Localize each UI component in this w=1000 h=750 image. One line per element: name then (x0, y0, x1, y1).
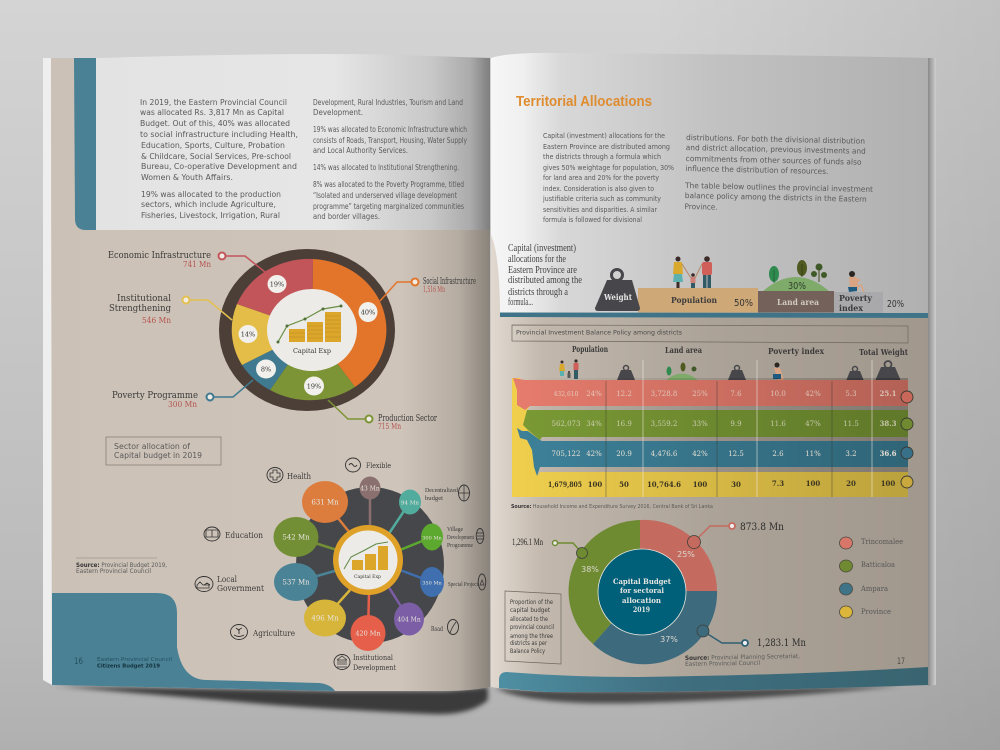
chart: sector bubble wheel (274, 476, 444, 651)
callout: table title: Provincial Investment Balance Policy among districts (516, 328, 683, 336)
icon: seated person (848, 271, 864, 292)
label: social infrastructure: 1,516 Mn (423, 285, 445, 294)
label: poverty programme: Poverty Programme (112, 391, 198, 401)
text block: territorial left column: index. Consideration is also given to (543, 184, 654, 193)
table row: Province: 50 (619, 480, 629, 489)
text block: left column intro: to social infrastructure including Health, (140, 130, 298, 139)
source note: left page: Source: Provincial Budget 2019, (76, 562, 167, 569)
text block: right column intro: Development. (313, 108, 363, 117)
icon: family (673, 256, 712, 288)
donut percentages (581, 550, 695, 644)
percent badges: 14% (241, 330, 255, 338)
table row: Province: 100 (806, 479, 820, 488)
text block: formula summary: districts through a (508, 286, 568, 298)
page shadow (55, 686, 900, 714)
table row: Ampara: 20.9 (616, 450, 632, 458)
table row: Province: 10,764.6 (647, 480, 681, 489)
label: production sector: 715 Mn (378, 422, 401, 431)
label: poverty programme: 300 Mn (168, 400, 197, 409)
source note: left page (76, 558, 167, 575)
table row: Trincomalee: 12.2 (616, 390, 632, 398)
callout: balance policy note: capital budget (510, 607, 551, 614)
bubble values: 94 Mn (401, 500, 419, 506)
bubble values: 496 Mn (311, 614, 339, 622)
land area segment: 30% (788, 281, 806, 292)
callout: balance policy note: districts as per (510, 640, 547, 647)
panel: right page (491, 53, 936, 692)
poverty segment: index (839, 303, 863, 313)
population segment (638, 288, 758, 312)
text block: formula summary: formula... (508, 296, 533, 308)
source note: right page: Source: Provincial Planning Secretariat, (685, 653, 800, 662)
heading: territorial allocations: Territorial Allocations (516, 94, 652, 110)
table row: Ampara: 42% (692, 450, 708, 458)
label: special project (448, 574, 486, 590)
legend: districts: Batticaloa (861, 561, 895, 569)
label: village development programme (447, 526, 484, 549)
center hub (333, 525, 403, 595)
table row: Batticaloa (552, 419, 897, 428)
table row: Trincomalee: 24% (586, 390, 602, 398)
chart: capital budget donut (219, 249, 395, 411)
label: economic infrastructure: 741 Mn (183, 260, 211, 269)
poverty segment (834, 292, 904, 313)
text block: formula summary: Capital (investment) (508, 242, 576, 254)
text block: territorial left column: sensitivities and disparities. A similar (543, 205, 657, 214)
table: column headers: Poverty index (768, 346, 824, 356)
label: economic infrastructure (108, 251, 265, 272)
table row: Ampara: 42% (586, 450, 602, 458)
table row: Batticaloa: 38.3 (879, 419, 897, 428)
table row: Ampara: 11% (805, 450, 821, 458)
table row: Trincomalee: 10.0 (770, 390, 786, 398)
callout: table title (512, 325, 908, 343)
text block: territorial left column: Capital (investment) allocations for the (543, 131, 665, 140)
label: flexible (346, 458, 391, 472)
bubble values: 537 Mn (282, 578, 310, 586)
table row: Ampara: 12.5 (728, 450, 744, 458)
label: agriculture: Agriculture (252, 629, 295, 638)
text block: left column intro: Fisheries, Livestock, Irrigation, Rural (141, 211, 280, 220)
table row: Province: 20 (846, 479, 856, 488)
label: village development programme: Programme (447, 542, 473, 549)
text block: right column intro: and Local Authority Services. (313, 146, 408, 155)
text block: left column intro: sectors, which include Agriculture, (141, 200, 276, 209)
table row: Province (548, 479, 895, 489)
poverty segment: Poverty (839, 293, 872, 303)
table row: Batticaloa: 34% (586, 420, 602, 428)
footer: left page (74, 657, 172, 670)
table: header icons (559, 359, 901, 381)
table: column headers: Land area (665, 345, 702, 355)
text block: left column intro: Bureau, Co-operative Development and (141, 162, 297, 171)
percent badges (238, 275, 378, 396)
legend: districts (840, 537, 903, 618)
label: health: Health (287, 472, 311, 481)
callout: Batticaloa amount (512, 538, 588, 558)
connectors (296, 488, 432, 633)
callout: Ampara amount: 1,283.1 Mn (757, 638, 806, 649)
table row: Trincomalee: 432,610 (554, 391, 579, 398)
text block: formula summary: distributed among the (508, 274, 582, 286)
table row: Batticaloa: 562,073 (552, 420, 580, 428)
poverty segment: 20% (887, 299, 904, 310)
callout: balance policy note: allocated to the (510, 616, 548, 623)
callout: sector allocation: Sector allocation of (114, 442, 190, 451)
table row: Trincomalee: 25% (692, 390, 708, 398)
land area segment (758, 277, 834, 312)
weight formula bar (595, 256, 904, 313)
text block: formula summary: allocations for the (508, 253, 566, 265)
population segment: Population (671, 296, 717, 306)
land area segment: Land area (777, 298, 819, 308)
label: local government: Local (217, 575, 237, 584)
donut centre text: Capital Budget (613, 577, 671, 586)
text block: left column intro: was allocated Rs. 3,817 Mn as Capital (140, 108, 284, 117)
table row: Ampara (552, 449, 897, 458)
bubble values: 404 Mn (397, 616, 421, 624)
callout: Ampara amount (697, 625, 806, 649)
table: coloured rows and map (512, 360, 908, 497)
bubble values: 631 Mn (311, 498, 339, 506)
page number: 17: 17 (897, 657, 905, 667)
donut centre text: 2019 (633, 605, 650, 614)
label: economic infrastructure: Economic Infrastructure (108, 251, 211, 261)
donut percentages: 38% (581, 565, 599, 574)
bubble values: 350 Mn (422, 580, 443, 586)
text block: territorial left column: Eastern Province are distributed among (543, 142, 670, 151)
label: social infrastructure (380, 277, 476, 301)
text block: right column intro: 19% was allocated to Economic Infrastructure which (313, 125, 467, 134)
label: institutional development: Institutional (353, 653, 394, 662)
text block: territorial left column (542, 131, 674, 224)
table row: Batticaloa: 16.9 (616, 420, 632, 428)
source note: right page: Eastern Provincial Council (685, 660, 760, 668)
text block: territorial right column: Province. (685, 202, 718, 212)
label: institutional strengthening: 546 Mn (142, 316, 171, 325)
label: education (204, 527, 263, 541)
label: institutional strengthening: Strengthening (109, 304, 171, 314)
table row: Ampara: 36.6 (879, 449, 897, 458)
label: decentralized budget: Decentralized (425, 487, 459, 494)
text block: left column intro: Budget. Out of this, 40% was allocated (140, 119, 290, 128)
table row: Batticaloa: 3,559.2 (651, 420, 677, 428)
source note: right page (685, 653, 800, 668)
callout: balance policy note: Proportion of the (510, 599, 553, 606)
label: production sector: Production Sector (378, 414, 437, 424)
label: special project: Special Project (448, 581, 478, 588)
callout: sector allocation: Capital budget in 2019 (114, 451, 202, 460)
text block: territorial left column: formula is followed for divisional (543, 215, 642, 224)
table row: Batticaloa: 11.6 (770, 420, 786, 428)
label: agriculture (230, 624, 295, 640)
text block: territorial right column: balance policy among the districts in the Eastern (685, 191, 867, 204)
table row: Ampara: 4,476.6 (651, 450, 678, 458)
text block: right column intro: consists of Roads, Transport, Housing, Water Supply (313, 136, 467, 145)
label: local government: Government (217, 584, 265, 593)
icon: weight (595, 270, 640, 311)
source note: table: Source: Household Income and Expenditure Survey 2016, Central Bank of Sri Lanka (511, 504, 713, 510)
table row: Trincomalee: 3,728.8 (651, 390, 677, 398)
icon: trees (769, 260, 827, 283)
text block: territorial right column: distributions. For both the divisional distribution (686, 133, 865, 146)
text block: territorial right column: influence the distribution of resources. (685, 164, 828, 176)
text block: left column intro (140, 98, 298, 220)
text block: territorial right column: The table below outlines the provincial investment (684, 181, 873, 194)
table row: Province: 7.3 (772, 479, 784, 488)
text block: left column intro: Women & Youth Affairs. (141, 173, 233, 182)
table row: Province: 100 (693, 480, 707, 489)
table row: Trincomalee: 5.3 (845, 390, 857, 398)
center hub: Capital Exp (354, 574, 381, 580)
label: social infrastructure: Social Infrastructure (423, 277, 476, 287)
table row: Province: 1,679,805 (548, 480, 582, 489)
chart icon: coins and trend line (276, 304, 342, 344)
percent badges: 40% (361, 308, 375, 316)
table row: Ampara: 3.2 (845, 450, 857, 458)
text block: formula summary (508, 242, 582, 308)
table row: Ampara: 705,122 (552, 450, 580, 458)
text block: left column intro: 19% was allocated to the production (141, 190, 281, 199)
table row: Province: 100 (881, 479, 895, 488)
table row: Trincomalee (554, 389, 897, 398)
bubble values (274, 476, 444, 651)
text block: territorial left column: the districts through a formula which (543, 152, 661, 161)
chart: capital budget by district donut (569, 520, 717, 664)
table row: Batticaloa: 9.9 (730, 420, 742, 428)
text block: formula summary: Eastern Province are (508, 264, 577, 276)
panel: left page (43, 54, 490, 691)
bubble values: 420 Mn (355, 630, 381, 638)
label: decentralized budget (425, 485, 470, 502)
table: row markers (901, 391, 913, 488)
legend: districts: Province (861, 608, 891, 616)
table row: Batticaloa: 33% (692, 420, 708, 428)
label: village development programme: Village (447, 526, 463, 533)
donut centre text: allocation (622, 596, 662, 605)
text block: right column intro: 14% was allocated to Institutional Strengthening. (313, 163, 459, 172)
population segment: 50% (734, 298, 753, 309)
callout: balance policy note (505, 591, 561, 664)
donut centre text (613, 577, 671, 614)
text block: left column intro: In 2019, the Eastern Provincial Council (140, 98, 287, 107)
icon: weight: Weight (603, 292, 632, 302)
percent badges: 19% (307, 382, 321, 390)
label: local government (195, 575, 265, 593)
label: institutional strengthening: Institutional (117, 294, 171, 304)
text block: territorial left column: for land area and 20% for the poverty (543, 173, 660, 182)
table row: Batticaloa: 47% (805, 420, 821, 428)
text block: territorial right column: and district allocation, previous investments and (686, 143, 866, 156)
table row: Trincomalee: 42% (805, 390, 821, 398)
text block: right column intro: “Isolated and underserved village development (313, 191, 457, 200)
label: road (431, 620, 458, 634)
label: decentralized budget: budget (425, 495, 443, 502)
footer: left page: Eastern Provincial Council (97, 657, 172, 663)
table: column headers (572, 344, 908, 357)
text block: right column intro: programme” targeting marginalized communities (313, 202, 464, 211)
table: column headers: Population (572, 344, 608, 354)
text block: territorial left column: justifiable criteria such as community (542, 194, 662, 203)
text block: left column intro: & Childcare, Social Services, Pre-school (141, 152, 291, 161)
chart: capital budget donut: Capital Exp (293, 348, 331, 355)
callout: Trincomalee amount (688, 522, 784, 548)
table row: Province: 30 (731, 480, 741, 489)
text block: territorial left column: gives 50% weightage for population, 30% (543, 163, 674, 172)
label: production sector (328, 400, 437, 431)
callout: balance policy note: provincial council (510, 624, 554, 631)
text block: territorial right column (684, 133, 874, 215)
bubble values: 542 Mn (282, 534, 310, 542)
label: flexible: Flexible (366, 461, 391, 470)
table row: Batticaloa: 11.5 (843, 420, 859, 428)
legend: districts: Ampara (860, 585, 888, 593)
donut percentages: 37% (660, 635, 678, 644)
text block: right column intro: 8% was allocated to the Poverty Programme, titled (313, 180, 464, 189)
table row: Ampara: 2.6 (772, 450, 784, 458)
label: village development programme: Development (447, 534, 474, 541)
legend: districts: Trincomalee (861, 538, 903, 546)
percent badges: 19% (270, 280, 284, 288)
text block: right column intro: and border villages. (313, 212, 380, 221)
donut centre text: for sectoral (620, 586, 664, 595)
bubble values: 43 Mn (360, 486, 380, 492)
table row: Province: 100 (588, 480, 602, 489)
table row: Trincomalee: 7.6 (730, 390, 742, 398)
callout: Batticaloa amount: 1,296.1 Mn (512, 538, 543, 548)
callout: sector allocation (106, 437, 221, 465)
donut percentages: 25% (677, 550, 695, 559)
source note: left page: Eastern Provincial Council (76, 568, 151, 575)
label: road: Road (431, 625, 443, 633)
label: health (267, 468, 311, 482)
text block: right column intro: Development, Rural Industries, Tourism and Land (313, 98, 463, 107)
label: institutional development (334, 653, 396, 672)
footer: left page: 16 (74, 657, 83, 667)
label: poverty programme (112, 380, 253, 409)
label: institutional development: Development (353, 663, 396, 672)
callout: Trincomalee amount: 873.8 Mn (740, 522, 784, 533)
callout: balance policy note: Balance Policy (510, 648, 545, 655)
label: education: Education (225, 531, 263, 540)
table row: Trincomalee: 25.1 (879, 389, 897, 398)
table: column headers: Total Weight (859, 347, 908, 357)
callout: balance policy note: among the three (510, 633, 553, 640)
text block: left column intro: Education, Sports, Culture, Probation (141, 141, 285, 150)
text block: right column intro (313, 98, 467, 221)
bubble values: 300 Mn (422, 536, 443, 542)
footer: left page: Citizens Budget 2019 (97, 664, 160, 670)
percent badges: 8% (261, 366, 271, 374)
label: institutional strengthening (109, 294, 232, 325)
text block: territorial right column: commitments from other sources of funds also (686, 154, 862, 167)
